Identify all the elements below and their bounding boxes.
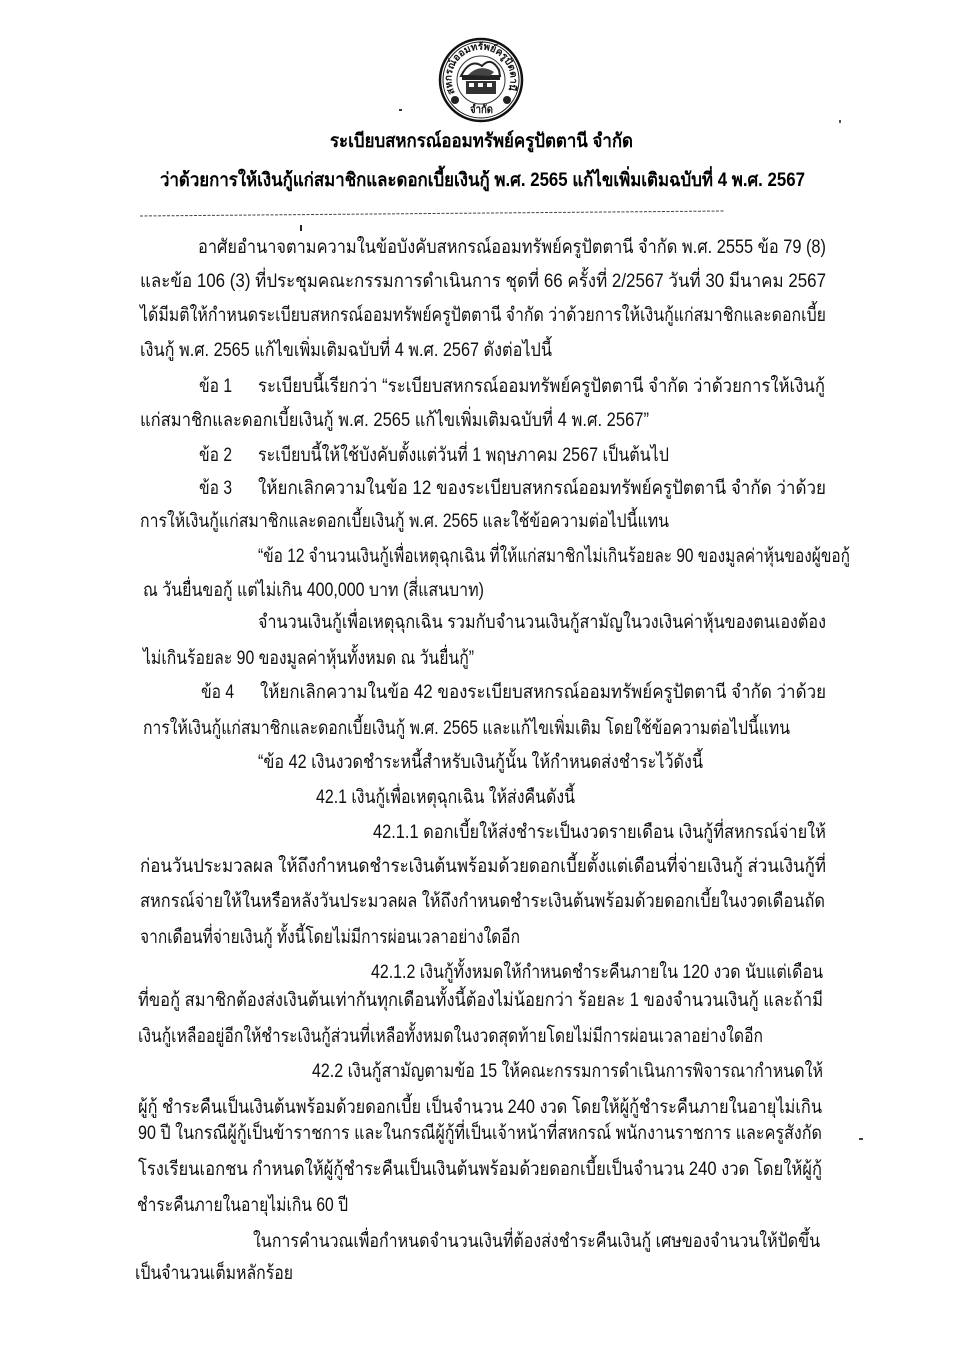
clause 1: ระเบียบนี้เรียกว่า “ระเบียบสหกรณ์ออมทรัพย์ครูปัตตานี จำกัด ว่าด้วยการให้เงินกู้ — [258, 372, 825, 397]
preamble paragraph: และข้อ 106 (3) ที่ประชุมคณะกรรมการดำเนินการ ชุดที่ 66 ครั้งที่ 2/2567 วันที่ 30 มีนาคม 2567 — [140, 267, 826, 293]
icon: cooperative seal: จำกัด — [470, 103, 493, 116]
clause 4: 42.1.2 เงินกู้ทั้งหมดให้กำหนดชำระคืนภายใน 120 งวด นับแต่เดือน — [371, 958, 823, 983]
title: ระเบียบสหกรณ์ออมทรัพย์ครูปัตตานี จำกัด — [330, 130, 633, 153]
clause 4: การให้เงินกู้แก่สมาชิกและดอกเบี้ยเงินกู้ พ.ศ. 2565 และแก้ไขเพิ่มเติม โดยใช้ข้อความต่อไปนี้แทน — [143, 714, 790, 739]
clause 2 — [199, 441, 669, 466]
clause 1: แก่สมาชิกและดอกเบี้ยเงินกู้ พ.ศ. 2565 แก้ไขเพิ่มเติมฉบับที่ 4 พ.ศ. 2567” — [140, 406, 649, 431]
clause 3: ณ วันยื่นขอกู้ แต่ไม่เกิน 400,000 บาท (สี่แสนบาท) — [143, 576, 484, 601]
clause 4: 42.1.1 ดอกเบี้ยให้ส่งชำระเป็นงวดรายเดือน เงินกู้ที่สหกรณ์จ่ายให้ — [373, 818, 826, 843]
clause 4: เงินกู้เหลืออยู่อีกให้ชำระเงินกู้ส่วนที่เหลือทั้งหมดในงวดสุดท้ายโดยไม่มีการผ่อนเวลาอย่างใดอีก — [138, 1022, 763, 1048]
closing paragraph — [135, 1227, 820, 1284]
title: ว่าด้วยการให้เงินกู้แก่สมาชิกและดอกเบี้ยเงินกู้ พ.ศ. 2565 แก้ไขเพิ่มเติมฉบับที่ 4 พ.ศ. 2567 — [160, 165, 805, 192]
clause 4: ก่อนวันประมวลผล ให้ถึงกำหนดชำระเงินต้นพร้อมด้วยดอกเบี้ยตั้งแต่เดือนที่จ่ายเงินกู้ ส่วนเงินกู้ที่ — [140, 852, 826, 877]
preamble paragraph — [138, 236, 826, 361]
clause 4: สหกรณ์จ่ายให้ในหรือหลังวันประมวลผล ให้ถึงกำหนดชำระเงินต้นพร้อมด้วยดอกเบี้ยในงวดเดือนถัด — [140, 887, 825, 912]
preamble paragraph: ได้มีมติให้กำหนดระเบียบสหกรณ์ออมทรัพย์ครูปัตตานี จำกัด ว่าด้วยการให้เงินกู้แก่สมาชิกและดอกเบี้ย — [138, 301, 826, 326]
clause 3: ไม่เกินร้อยละ 90 ของมูลค่าหุ้นทั้งหมด ณ วันยื่นกู้” — [141, 644, 474, 670]
clause 1 — [140, 372, 825, 431]
title — [160, 130, 805, 192]
clause 2: ระเบียบนี้ให้ใช้บังคับตั้งแต่วันที่ 1 พฤษภาคม 2567 เป็นต้นไป — [258, 441, 669, 466]
clause 3 — [140, 477, 850, 670]
clause 4: ข้อ 4 — [201, 682, 234, 703]
clause 4 — [137, 681, 826, 1217]
clause 2: ข้อ 2 — [199, 445, 232, 466]
clause 1: ข้อ 1 — [199, 376, 232, 397]
clause 4: 42.2 เงินกู้สามัญตามข้อ 15 ให้คณะกรรมการดำเนินการพิจารณากำหนดให้ — [312, 1060, 823, 1082]
clause 4: ให้ยกเลิกความในข้อ 42 ของระเบียบสหกรณ์ออมทรัพย์ครูปัตตานี จำกัด ว่าด้วย — [260, 681, 826, 703]
clause 4: 42.1 เงินกู้เพื่อเหตุฉุกเฉิน ให้ส่งคืนดังนี้ — [316, 783, 575, 809]
clause 4: 90 ปี ในกรณีผู้กู้เป็นข้าราชการ และในกรณีผู้กู้ที่เป็นเจ้าหน้าที่สหกรณ์ พนักงานราชการ และครูสังกัด — [138, 1119, 822, 1144]
clause 4: ที่ขอกู้ สมาชิกต้องส่งเงินต้นเท่ากันทุกเดือนทั้งนี้ต้องไม่น้อยกว่า ร้อยละ 1 ของจำนวนเงินกู้ และถ้ามี — [138, 986, 823, 1012]
clause 3: จำนวนเงินกู้เพื่อเหตุฉุกเฉิน รวมกับจำนวนเงินกู้สามัญในวงเงินค่าหุ้นของตนเองต้อง — [258, 608, 826, 634]
icon: cooperative seal — [438, 38, 524, 122]
clause 4: จากเดือนที่จ่ายเงินกู้ ทั้งนี้โดยไม่มีการผ่อนเวลาอย่างใดอีก — [140, 923, 520, 948]
icon: cooperative seal: สหกรณ์ออมทรัพย์ครูปัตตานี — [446, 41, 518, 95]
clause 4: “ข้อ 42 เงินงวดชำระหนี้สำหรับเงินกู้นั้น ให้กำหนดส่งชำระไว้ดังนี้ — [258, 748, 703, 773]
closing paragraph: ในการคำนวณเพื่อกำหนดจำนวนเงินที่ต้องส่งชำระคืนเงินกู้ เศษของจำนวนให้ปัดขึ้น — [253, 1227, 820, 1252]
preamble paragraph: อาศัยอำนาจตามความในข้อบังคับสหกรณ์ออมทรัพย์ครูปัตตานี จำกัด พ.ศ. 2555 ข้อ 79 (8) — [198, 236, 826, 258]
clause 4: ผู้กู้ ชำระคืนเป็นเงินต้นพร้อมด้วยดอกเบี้ย เป็นจำนวน 240 งวด โดยให้ผู้กู้ชำระคืนภายในอายุไม่เกิน — [138, 1093, 822, 1119]
clause 3: การให้เงินกู้แก่สมาชิกและดอกเบี้ยเงินกู้ พ.ศ. 2565 และใช้ข้อความต่อไปนี้แทน — [140, 507, 669, 532]
clause 4: โรงเรียนเอกชน กำหนดให้ผู้กู้ชำระคืนเป็นเงินต้นพร้อมด้วยดอกเบี้ยเป็นจำนวน 240 งวด โดยให้ผู้กู้ — [138, 1155, 822, 1180]
preamble paragraph: เงินกู้ พ.ศ. 2565 แก้ไขเพิ่มเติมฉบับที่ 4 พ.ศ. 2567 ดังต่อไปนี้ — [140, 336, 552, 361]
closing paragraph: เป็นจำนวนเต็มหลักร้อย — [135, 1260, 293, 1284]
clause 3: ข้อ 3 — [199, 478, 232, 499]
clause 4: ชำระคืนภายในอายุไม่เกิน 60 ปี — [137, 1194, 348, 1217]
clause 3: ให้ยกเลิกความในข้อ 12 ของระเบียบสหกรณ์ออมทรัพย์ครูปัตตานี จำกัด ว่าด้วย — [258, 477, 826, 499]
